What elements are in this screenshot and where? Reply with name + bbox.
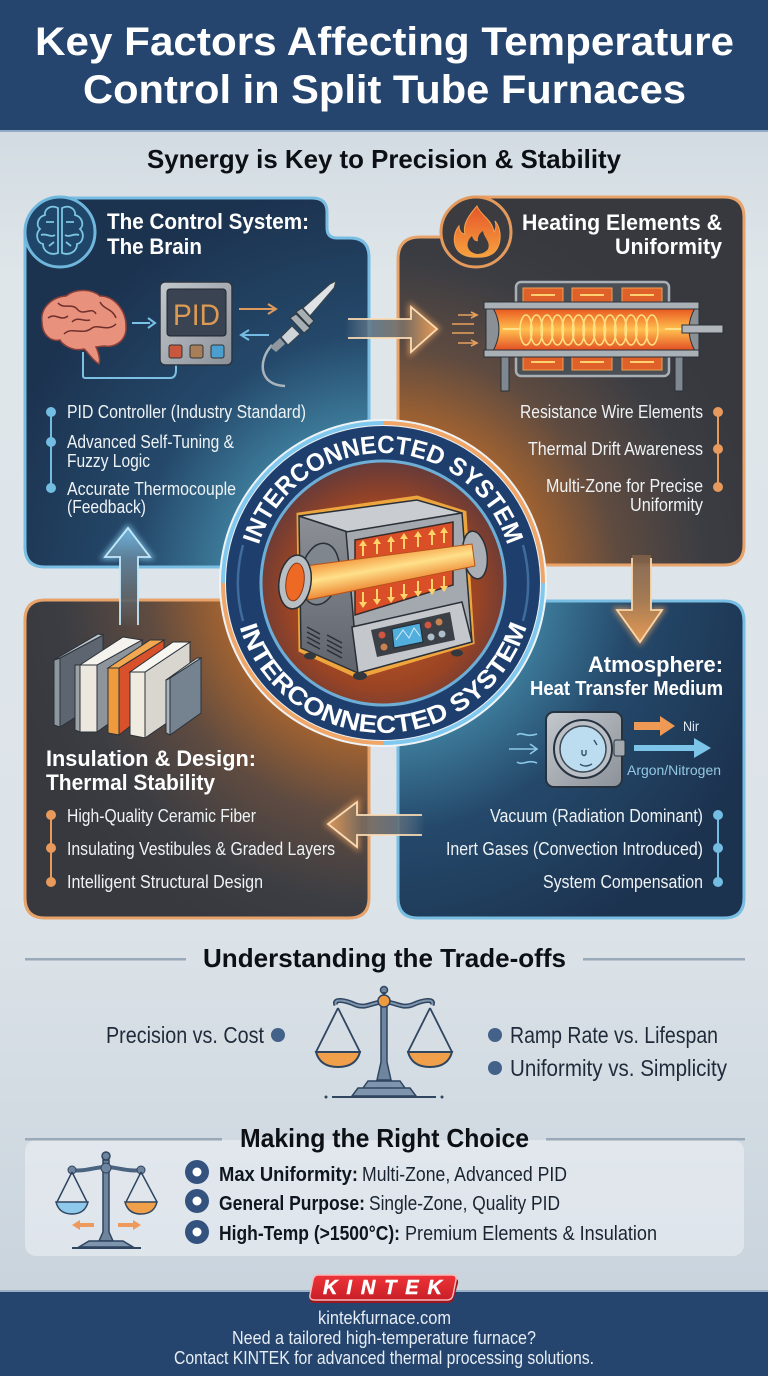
panel heading: The Control System:: [107, 209, 309, 234]
bullet list: control: Accurate Thermocouple: [67, 479, 236, 499]
trade-off right labels: Uniformity vs. Simplicity: [510, 1055, 727, 1081]
panel: heating elements: [398, 197, 744, 565]
arrow: Argon/Nitrogen output: [627, 738, 721, 778]
icon: insulation layers: [54, 634, 201, 738]
arrow: heating to atmosphere: [617, 555, 662, 642]
panel heading: Heating Elements &: [522, 210, 722, 235]
bullet list: heating: Resistance Wire Elements: [520, 402, 703, 422]
footer text: kintekfurnace.com: [318, 1308, 451, 1328]
icon: brain illustration: [42, 290, 176, 378]
icon: split tube furnace: [275, 498, 490, 680]
ring text top: INTERCONNECTED SYSTEM: [242, 436, 524, 544]
bullet list: heating: [520, 402, 723, 515]
panel: insulation and design: [25, 600, 369, 918]
arrow: control to heating: [345, 307, 437, 352]
bullet list: atmosphere: System Compensation: [543, 872, 703, 892]
bullet list: heating: Uniformity: [630, 495, 703, 515]
title: Key Factors Affecting Temperature: [35, 20, 734, 64]
panel heading: Uniformity: [615, 234, 723, 259]
icon: PID controller: PID: [173, 299, 220, 332]
arrow: atmosphere to insulation: [328, 802, 425, 847]
recommendation: high temp: Premium Elements & Insulation: [405, 1223, 657, 1245]
ring text bottom: INTERCONNECTED SYSTEM: [240, 622, 526, 734]
bullet list: insulation: Insulating Vestibules & Graded Layers: [67, 839, 335, 859]
icon: thermocouple: [263, 281, 336, 386]
logo: KINTEK: [310, 1275, 458, 1303]
icon: flame badge: [441, 197, 511, 267]
trade-off right labels: [488, 1022, 727, 1081]
arrow: Argon/Nitrogen output: Argon/Nitrogen: [627, 762, 721, 778]
panel heading: Heat Transfer Medium: [530, 678, 723, 700]
icon: vacuum chamber: [509, 712, 625, 787]
recommendation: max uniformity: Multi-Zone, Advanced PID: [362, 1164, 567, 1186]
arrow: insulation to control: [105, 528, 150, 628]
panel: making the right choice: [25, 1123, 745, 1256]
title: [35, 20, 734, 112]
recommendation: max uniformity: Max Uniformity:: [219, 1164, 358, 1186]
bullet list: control: (Feedback): [67, 497, 146, 517]
panel: control system: [25, 197, 369, 567]
trade-off left label: Precision vs. Cost: [106, 1022, 265, 1048]
bullet list: atmosphere: [446, 806, 723, 892]
chamber heat arrows: [359, 527, 448, 608]
logo: KINTEK: KINTEK: [323, 1277, 444, 1299]
arrow: Nir output: Nir: [683, 718, 699, 734]
footer text: Need a tailored high-temperature furnace?: [232, 1328, 536, 1348]
recommendation: high temp: [185, 1220, 657, 1245]
panel heading: Atmosphere:: [588, 652, 723, 677]
icon: heating tube diagram: [452, 282, 723, 391]
panel heading: Insulation & Design:: [46, 746, 256, 771]
bullet list: atmosphere: Inert Gases (Convection Introduced): [446, 839, 703, 859]
arrow: Nir output: [634, 716, 699, 736]
icon: brain badge: [25, 197, 95, 267]
bullet list: control: Fuzzy Logic: [67, 451, 150, 471]
header banner: [0, 0, 768, 132]
icon: PID controller: [160, 282, 232, 365]
panel heading: [522, 210, 723, 259]
central badge: interconnected system: [219, 419, 547, 747]
bullet list: control: [46, 402, 306, 517]
panel heading: [530, 652, 723, 700]
recommendation: high temp: High-Temp (>1500°C):: [219, 1223, 400, 1245]
bullet list: control: Advanced Self-Tuning &: [67, 432, 234, 452]
bullet list: insulation: [46, 806, 335, 892]
footer text: [174, 1308, 594, 1368]
title: Control in Split Tube Furnaces: [83, 68, 686, 112]
panel heading: [107, 209, 309, 259]
panel heading: Thermal Stability: [46, 770, 216, 795]
bullet list: heating: Multi-Zone for Precise: [546, 476, 703, 496]
subtitle: Synergy is Key to Precision & Stability: [147, 144, 622, 174]
footer text: Contact KINTEK for advanced thermal processing solutions.: [174, 1348, 594, 1368]
recommendation: general purpose: General Purpose:: [219, 1193, 365, 1215]
bullet list: atmosphere: Vacuum (Radiation Dominant): [490, 806, 703, 826]
heading: right choice: Making the Right Choice: [240, 1123, 529, 1153]
arrows: PID signal: [239, 304, 276, 340]
panel heading: The Brain: [107, 234, 202, 259]
icon: small balance scale: [56, 1152, 157, 1248]
bullet list: control: PID Controller (Industry Standard): [67, 402, 306, 422]
panel heading: [46, 746, 256, 795]
divider and heading: trade-offs: Understanding the Trade-offs: [203, 943, 566, 973]
recommendation: general purpose: [185, 1189, 560, 1215]
bullet list: insulation: High-Quality Ceramic Fiber: [67, 806, 256, 826]
footer: [0, 1275, 768, 1376]
bullet list: heating: Thermal Drift Awareness: [528, 439, 703, 459]
panel: atmosphere: [398, 601, 744, 918]
icon: balance scale: [316, 986, 452, 1098]
trade-off right labels: Ramp Rate vs. Lifespan: [510, 1022, 718, 1048]
recommendation: max uniformity: [185, 1160, 567, 1186]
recommendation: general purpose: Single-Zone, Quality PID: [369, 1193, 560, 1215]
bullet list: insulation: Intelligent Structural Design: [67, 872, 263, 892]
